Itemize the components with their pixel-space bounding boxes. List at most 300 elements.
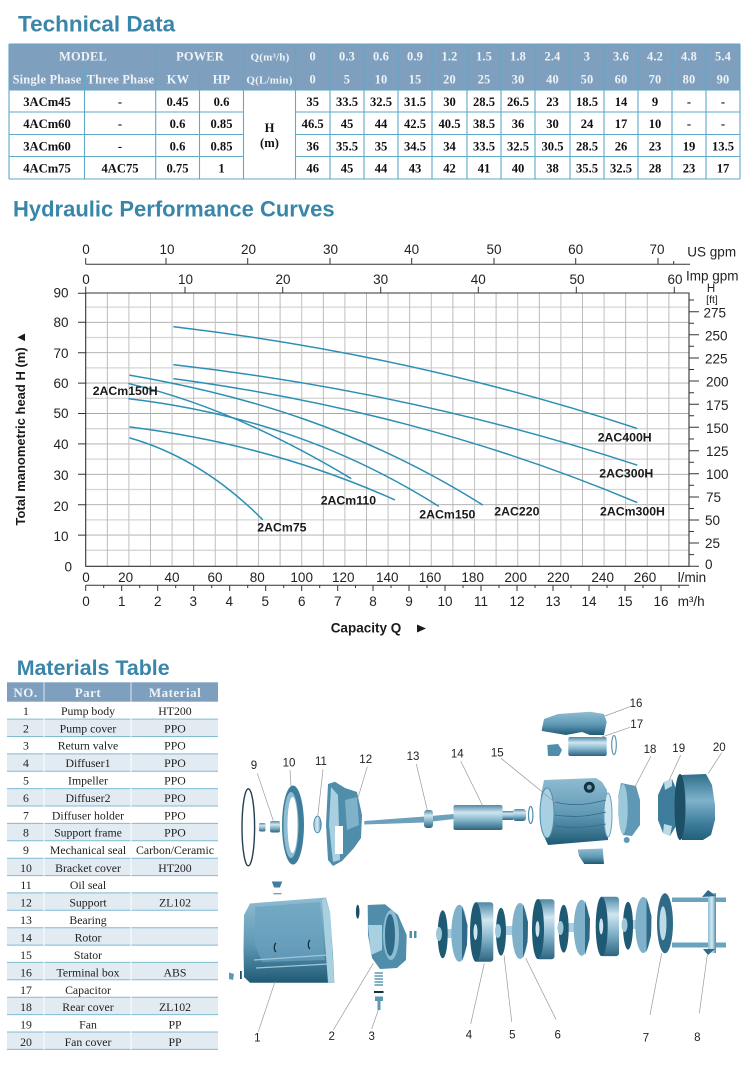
axis: Imp gpm: 40 xyxy=(471,272,486,287)
row: 4ACm75: 42 xyxy=(443,162,456,176)
table rows: 5 xyxy=(23,774,29,788)
axis: head in feet xyxy=(689,283,729,572)
axis: cubic metres per hour: 5 xyxy=(262,594,269,609)
table header text: 80 xyxy=(683,72,695,86)
stage 4 and diffuser holder xyxy=(622,893,673,953)
axis: litres per minute: 120 xyxy=(332,570,355,585)
row: 3ACm60: 33.5 xyxy=(473,139,495,153)
row: 4ACm60: - xyxy=(687,117,691,131)
table header: NO. xyxy=(13,685,38,700)
axis: cubic metres per hour: 4 xyxy=(226,594,234,609)
axis: head in feet: 250 xyxy=(705,328,728,344)
plot grid xyxy=(86,293,689,566)
axis: US gpm xyxy=(82,242,736,264)
row: 3ACm45: - xyxy=(687,95,691,109)
table rows: 14 xyxy=(20,930,32,944)
row: 4ACm75: 46 xyxy=(306,162,319,176)
curve: 2ACm75 xyxy=(130,438,262,519)
row: 4ACm75: 4ACm75 xyxy=(23,162,71,176)
row: 3ACm60: 26 xyxy=(615,139,627,153)
table header text: 0.6 xyxy=(373,50,389,64)
axis: Imp gpm: 0 xyxy=(82,272,90,287)
part numbers: 4 xyxy=(466,1030,473,1042)
stage 3 xyxy=(558,897,619,956)
axis: cubic metres per hour: 15 xyxy=(617,594,633,609)
curve: 2ACm300H xyxy=(174,379,637,502)
axis: Imp gpm: 60 xyxy=(667,272,683,287)
axis: litres per minute: 100 xyxy=(290,570,313,585)
part 3: return valve xyxy=(374,973,384,1010)
table rows: Fan xyxy=(79,1018,97,1032)
table header text: 3.6 xyxy=(613,50,629,64)
part numbers: 11 xyxy=(315,756,327,768)
axis: litres per minute: 60 xyxy=(207,570,223,585)
row: 3ACm60 xyxy=(23,139,734,153)
table rows: Impeller xyxy=(68,774,108,788)
part 11: oil seal xyxy=(314,816,321,833)
row: 4ACm75: 28 xyxy=(649,162,661,176)
table rows: PPO xyxy=(164,721,186,735)
table rows: 3 xyxy=(23,739,29,753)
table rows: Terminal box xyxy=(56,965,120,979)
part numbers: 10 xyxy=(283,758,295,770)
part numbers: 14 xyxy=(451,748,464,760)
table rows: 19 xyxy=(20,1018,32,1032)
part 20: fan cover xyxy=(674,774,715,840)
part 8: support frame xyxy=(672,890,726,955)
table rows: PP xyxy=(168,1035,182,1049)
row: 4ACm75: 41 xyxy=(478,162,490,176)
axis: head in feet: 75 xyxy=(706,490,721,505)
table header text: 5 xyxy=(344,72,350,86)
row: 4ACm75: 4AC75 xyxy=(101,162,139,176)
part numbers: 2 xyxy=(328,1031,335,1043)
row: 3ACm60: 19 xyxy=(683,139,695,153)
axis: cubic metres per hour: 9 xyxy=(405,594,413,609)
table header: Part xyxy=(75,685,101,700)
row: 4ACm75 xyxy=(23,162,729,176)
row: 4ACm75: 44 xyxy=(375,162,388,176)
part 9: seal ring and mechanical seal xyxy=(242,789,280,866)
table header text: 10 xyxy=(375,72,387,86)
row: 4ACm60: 46.5 xyxy=(302,117,324,131)
table header text: 0 xyxy=(309,72,316,86)
part 16: terminal box xyxy=(542,712,607,735)
table header text: 70 xyxy=(649,72,661,86)
table header text: Three Phase xyxy=(87,72,155,86)
part numbers: 8 xyxy=(694,1032,701,1044)
row: 3ACm60: 13.5 xyxy=(712,139,734,153)
row: 4ACm60: 0.6 xyxy=(170,117,185,131)
axis: cubic metres per hour: 6 xyxy=(298,594,305,609)
axis: head in feet: 150 xyxy=(706,421,729,436)
table rows: 7 xyxy=(23,808,29,822)
axis: cubic metres per hour: 0 xyxy=(82,594,90,609)
curve labels: 2ACm75 xyxy=(257,521,307,535)
part numbers: 13 xyxy=(407,751,419,763)
table header text: 1.5 xyxy=(476,50,492,64)
axis: US gpm: 50 xyxy=(486,242,502,257)
axis: head in feet: 275 xyxy=(704,306,726,320)
axis: head in metres: 40 xyxy=(53,437,68,452)
part 19: fan xyxy=(658,779,677,836)
materials table xyxy=(7,682,218,1050)
row: 4ACm60: 10 xyxy=(649,117,661,131)
row: 3ACm45: 18.5 xyxy=(576,95,598,109)
table header text: 0.9 xyxy=(407,50,423,64)
axis: cubic metres per hour: 8 xyxy=(369,594,377,609)
table header text: Q(m³/h) xyxy=(251,52,290,64)
table header text xyxy=(13,50,731,86)
axis: head in metres: 70 xyxy=(53,346,68,361)
row: 4ACm60: - xyxy=(721,117,725,131)
row: 3ACm60: 34.5 xyxy=(404,139,426,153)
table header text: 25 xyxy=(478,72,490,86)
table rows: PP xyxy=(168,1018,182,1032)
part numbers: 5 xyxy=(509,1030,516,1042)
axis: head in metres: 50 xyxy=(53,406,68,421)
row: 3ACm60: 0.85 xyxy=(210,139,233,153)
table rows: PPO xyxy=(164,739,186,753)
row: 3ACm60: - xyxy=(118,139,122,153)
row: 3ACm45: 32.5 xyxy=(370,95,392,109)
curve labels: 2ACm150H xyxy=(93,384,158,398)
row: 3ACm45: 0.6 xyxy=(214,95,229,109)
axis: Imp gpm: 20 xyxy=(275,272,291,287)
part numbers: 20 xyxy=(713,742,726,754)
axis: litres per minute: 240 xyxy=(591,570,614,585)
row: 3ACm45: 33.5 xyxy=(336,95,358,109)
part 12: support xyxy=(326,782,362,866)
curve: 2AC300H xyxy=(174,365,637,465)
row: 4ACm75: 38 xyxy=(546,162,559,176)
axis: head in metres: 30 xyxy=(53,468,68,483)
table rows: HT200 xyxy=(158,861,192,875)
axis: cubic metres per hour: 14 xyxy=(581,594,597,609)
row: 3ACm60: 3ACm60 xyxy=(23,139,71,153)
curve labels xyxy=(93,384,665,535)
table header text: 90 xyxy=(717,72,729,86)
axis: head in metres: 60 xyxy=(53,376,68,391)
table header text: 50 xyxy=(581,72,593,86)
table rows: Rear cover xyxy=(62,1000,114,1014)
row: 3ACm60: 35 xyxy=(375,139,387,153)
part 10: bracket cover xyxy=(282,786,304,864)
row: 4ACm75: 17 xyxy=(717,162,729,176)
axis: litres per minute: 0 xyxy=(82,570,90,585)
row: 3ACm60: 36 xyxy=(306,139,319,153)
part numbers: 17 xyxy=(630,719,643,731)
row: 3ACm45: 35 xyxy=(306,95,319,109)
table header text: 0.3 xyxy=(339,50,355,64)
row: 4ACm60: 0.85 xyxy=(210,117,233,131)
curve: 2ACm150H xyxy=(129,384,351,478)
row: 4ACm60: 30 xyxy=(546,117,559,131)
table header text: 1.8 xyxy=(510,50,526,64)
table rows: Diffuser2 xyxy=(66,791,111,805)
axis: head in metres: 10 xyxy=(53,529,68,544)
table header text: 30 xyxy=(512,72,524,86)
axis: US gpm: 0 xyxy=(82,242,90,257)
table rows: Support frame xyxy=(54,826,122,840)
axis: litres per minute: 40 xyxy=(164,570,180,585)
table rows: Rotor xyxy=(75,930,102,944)
curve labels: 2ACm110 xyxy=(321,494,376,508)
axis: head in metres: 20 xyxy=(53,499,68,514)
axis: head in feet: 125 xyxy=(706,444,729,459)
curve labels: 2AC220 xyxy=(494,504,540,518)
curve labels: 2AC300H xyxy=(599,466,653,480)
table rows: 10 xyxy=(20,861,32,875)
part 13: shaft and bearing xyxy=(364,810,454,828)
row: 3ACm45: 0.45 xyxy=(166,95,189,109)
table header text: KW xyxy=(167,72,190,86)
row: 3ACm60: 32.5 xyxy=(507,139,529,153)
table rows: 8 xyxy=(23,826,29,840)
row: 3ACm45: 30 xyxy=(443,95,456,109)
row: 3ACm60: 0.6 xyxy=(170,139,185,153)
table grid lines xyxy=(9,44,740,179)
row: 4ACm60: 38.5 xyxy=(473,117,495,131)
axis: US gpm: 40 xyxy=(404,242,419,257)
row: 3ACm45: 28.5 xyxy=(473,95,495,109)
table rows: Diffuser1 xyxy=(66,756,111,770)
leader lines xyxy=(257,707,722,1032)
table rows: Support xyxy=(69,896,107,910)
table rows: 16 xyxy=(20,965,32,979)
table rows: 12 xyxy=(20,896,32,910)
table header xyxy=(7,682,218,702)
row: 4ACm75: 32.5 xyxy=(610,162,632,176)
row: 4ACm75: 43 xyxy=(409,162,421,176)
axis: litres per minute: 200 xyxy=(504,570,527,585)
axis: cubic metres per hour: 7 xyxy=(334,594,341,609)
table rows: 9 xyxy=(23,843,29,857)
axis: Imp gpm: 10 xyxy=(178,272,193,287)
axis: Imp gpm xyxy=(82,268,739,293)
table header text: 20 xyxy=(443,72,456,86)
row: 4ACm60: 36 xyxy=(512,117,524,131)
row: 3ACm45: 9 xyxy=(652,95,658,109)
table header: Material xyxy=(149,685,201,700)
row: 3ACm60: 30.5 xyxy=(541,139,564,153)
part numbers: 6 xyxy=(554,1030,561,1042)
part numbers: 3 xyxy=(368,1031,375,1043)
table header text: 60 xyxy=(615,72,627,86)
table rows: 17 xyxy=(20,983,32,997)
axis: Imp gpm: 30 xyxy=(373,272,388,287)
exploded pump diagram xyxy=(229,698,726,1044)
axis: cubic metres per hour: m³/h xyxy=(678,594,705,609)
curve labels: 2AC400H xyxy=(598,430,652,444)
axis: cubic metres per hour: 3 xyxy=(190,594,197,609)
row: 4ACm75: 23 xyxy=(683,162,695,176)
table rows: 6 xyxy=(23,791,29,805)
row: 3ACm45: 31.5 xyxy=(404,95,426,109)
part numbers xyxy=(251,698,726,1044)
axis: head in feet: [ft] xyxy=(706,294,718,306)
H (m) merged cell: H xyxy=(265,121,275,135)
part 2: pump cover xyxy=(356,904,416,969)
curve labels: 2ACm300H xyxy=(600,504,665,518)
table header text: 0 xyxy=(309,50,316,64)
title: Hydraulic Performance Curves: Hydraulic Performance Curves xyxy=(13,197,335,222)
row: 4ACm75: 0.75 xyxy=(166,162,189,176)
part numbers: 15 xyxy=(491,748,504,760)
part numbers: 9 xyxy=(251,760,257,772)
axis: cubic metres per hour: 13 xyxy=(545,594,561,609)
row: 3ACm45: 3ACm45 xyxy=(23,95,71,109)
table rows: 18 xyxy=(20,1000,32,1014)
axis: litres per minute xyxy=(82,570,706,585)
table rows: Pump cover xyxy=(60,721,116,735)
curve: 2ACm150 xyxy=(129,399,438,506)
table header text: Single Phase xyxy=(13,72,82,86)
row: 3ACm45: - xyxy=(721,95,725,109)
H (m) merged cell: (m) xyxy=(260,136,279,150)
row: 4ACm60: - xyxy=(118,117,122,131)
plot frame xyxy=(86,293,689,566)
axis: head in metres: 0 xyxy=(64,560,72,574)
axis: head in feet: 200 xyxy=(706,374,729,390)
axis: US gpm: US gpm xyxy=(687,244,736,260)
table rows: Capacitor xyxy=(65,983,111,997)
column gaps xyxy=(44,702,131,1050)
row: 4ACm60: 44 xyxy=(375,117,388,131)
part numbers: 18 xyxy=(644,744,656,756)
part numbers: 12 xyxy=(359,754,372,766)
curve: 2ACm110 xyxy=(130,427,394,500)
table rows: Pump body xyxy=(61,704,115,718)
row: 3ACm45: - xyxy=(118,95,122,109)
table header text: POWER xyxy=(176,50,225,64)
table header text: 3 xyxy=(584,50,590,64)
axis: cubic metres per hour: 11 xyxy=(474,594,488,609)
axis: litres per minute: 180 xyxy=(461,570,484,585)
parts 4-7: impeller and diffuser stages xyxy=(436,893,673,962)
table rows: Oil seal xyxy=(70,878,107,892)
axis: head in feet: 25 xyxy=(705,536,720,551)
row: 4ACm75: 45 xyxy=(341,162,353,176)
axis: US gpm: 30 xyxy=(323,242,338,257)
table rows: PPO xyxy=(164,756,186,770)
axis: head in metres xyxy=(53,286,86,574)
row: 4ACm60: 42.5 xyxy=(404,117,426,131)
table header text: 40 xyxy=(546,72,559,86)
table header text: 15 xyxy=(409,72,421,86)
axis: cubic metres per hour: 12 xyxy=(509,594,525,609)
part numbers: 7 xyxy=(643,1032,649,1044)
table header text: 2.4 xyxy=(544,50,561,64)
table rows: Carbon/Ceramic xyxy=(136,843,214,857)
table header band xyxy=(9,44,740,90)
axis: cubic metres per hour: 2 xyxy=(154,594,161,609)
axis: head in feet: 100 xyxy=(706,467,729,482)
part 1: pump body xyxy=(229,882,334,983)
axis: head in metres: 90 xyxy=(53,286,68,300)
table rows: Return valve xyxy=(58,739,118,753)
axis: head in feet: 175 xyxy=(706,398,729,413)
stage 1 xyxy=(436,902,493,962)
curve labels: 2ACm150 xyxy=(419,508,476,522)
axis: Imp gpm: Imp gpm xyxy=(686,268,739,283)
row: 4ACm60 xyxy=(23,117,725,131)
table rows: 11 xyxy=(20,878,32,892)
table rows: ZL102 xyxy=(159,1000,191,1014)
row: 4ACm60: 24 xyxy=(581,117,594,131)
row: 4ACm60: 45 xyxy=(341,117,353,131)
row: 3ACm60: 34 xyxy=(443,139,456,153)
axis: cubic metres per hour: 1 xyxy=(118,594,125,609)
table rows: Diffuser holder xyxy=(52,808,124,822)
chart: hydraulic performance curves xyxy=(13,242,739,636)
table rows: Mechanical seal xyxy=(50,843,127,857)
row: 4ACm60: 17 xyxy=(615,117,627,131)
row: 3ACm45: 26.5 xyxy=(507,95,529,109)
table header text: 4.8 xyxy=(681,50,697,64)
axis: cubic metres per hour: 16 xyxy=(653,594,669,609)
axis: head in metres: 80 xyxy=(53,315,68,330)
axis: head in feet: 50 xyxy=(705,513,720,528)
row: 4ACm60: 4ACm60 xyxy=(23,117,71,131)
table rows: 4 xyxy=(23,756,29,770)
axis: head in feet: 225 xyxy=(705,352,728,366)
table rows: Bracket cover xyxy=(55,861,121,875)
axis title: capacity Q: Capacity Q xyxy=(331,620,401,636)
axis: litres per minute: 140 xyxy=(376,570,399,585)
table rows: ABS xyxy=(164,965,186,979)
table rows: PPO xyxy=(164,808,186,822)
row: 3ACm45: 14 xyxy=(615,95,628,109)
axis: US gpm: 10 xyxy=(159,242,175,257)
axis: litres per minute: l/min xyxy=(678,570,706,585)
axis: cubic metres per hour xyxy=(82,585,705,609)
row: 3ACm60: 35.5 xyxy=(336,139,358,153)
part 17: capacitor xyxy=(547,736,616,756)
table rows: PPO xyxy=(164,791,186,805)
row: 3ACm45 xyxy=(23,95,725,109)
axis: US gpm: 20 xyxy=(241,242,256,257)
alternating row bands xyxy=(7,719,218,1049)
curve: 2AC400H xyxy=(174,327,637,428)
row: 3ACm60: 28.5 xyxy=(576,139,598,153)
axis: litres per minute: 160 xyxy=(419,570,441,585)
axis: litres per minute: 260 xyxy=(634,570,656,585)
table rows: PPO xyxy=(164,826,186,840)
table rows: 20 xyxy=(20,1035,32,1049)
table header text: MODEL xyxy=(59,50,107,64)
axis: cubic metres per hour: 10 xyxy=(437,594,453,609)
row: 4ACm75: 40 xyxy=(512,162,524,176)
axis: head in feet: 0 xyxy=(705,557,713,572)
row: 4ACm75: 1 xyxy=(218,162,225,176)
table rows: Stator xyxy=(74,948,102,962)
axis: litres per minute: 20 xyxy=(118,570,133,585)
technical data table xyxy=(9,44,740,179)
axis: Imp gpm: 50 xyxy=(569,272,585,287)
table header text: HP xyxy=(213,72,231,86)
axis title: total manometric head: Total manometric head H (m) ▲ xyxy=(13,331,28,526)
axis: litres per minute: 80 xyxy=(250,570,265,585)
table rows: 15 xyxy=(20,948,32,962)
table rows: 1 xyxy=(23,704,29,718)
row: 3ACm45: 23 xyxy=(546,95,559,109)
table rows: Fan cover xyxy=(65,1035,111,1049)
axis: head in feet: H xyxy=(707,283,715,295)
table rows: HT200 xyxy=(158,704,192,718)
table rows: PPO xyxy=(164,774,186,788)
table rows: 2 xyxy=(23,721,29,735)
